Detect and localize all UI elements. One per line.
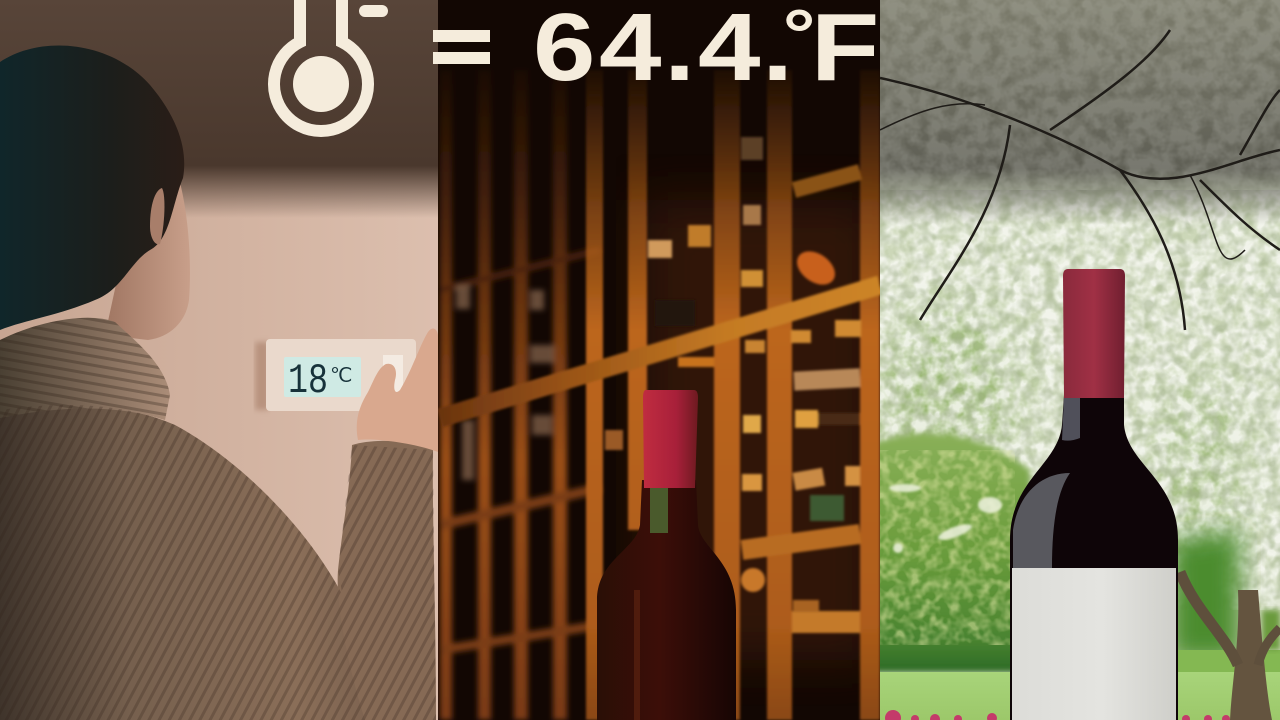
- thermostat reading: 18: [288, 357, 328, 405]
- panel: spring orchard: [870, 0, 1280, 720]
- distant foliage: [870, 434, 1030, 672]
- bottle glass: [1010, 395, 1178, 720]
- panel: person adjusting thermostat: [0, 0, 438, 720]
- sweater collar: [0, 318, 170, 420]
- dark upper band: [880, 0, 1280, 225]
- heading: thermometer equals 64.4°F: [274, 0, 879, 131]
- branches: [880, 30, 1280, 330]
- left shelves: [440, 250, 600, 650]
- warm glow: [640, 200, 880, 660]
- green wash behind blossoms: [880, 310, 1235, 560]
- bottle neck highlight: [650, 488, 668, 533]
- tree trunk: [1230, 590, 1272, 720]
- person ear: [150, 188, 164, 244]
- tree limbs: [1180, 572, 1238, 665]
- panel: wine cellar: [438, 0, 880, 720]
- foreground bottle: [1010, 269, 1178, 720]
- hand: [357, 328, 438, 452]
- collar texture: [0, 318, 170, 420]
- foreground bottle: [597, 390, 736, 720]
- thermostat: [255, 339, 416, 411]
- person face and neck: [105, 175, 190, 340]
- sweater sleeve: [338, 441, 436, 720]
- sweater body: [0, 405, 372, 720]
- green behind tree: [1170, 530, 1240, 660]
- dim stored bottles: [456, 285, 554, 480]
- grass: [880, 672, 1280, 720]
- blossom shadows: [880, 190, 1280, 610]
- rack right, sharper: [440, 70, 880, 720]
- dark upper wall band: [0, 0, 438, 218]
- knit texture: [0, 405, 436, 720]
- thermostat screen: [284, 357, 361, 397]
- bottle capsule: [643, 390, 698, 488]
- white sprays: [889, 484, 1002, 553]
- thermostat button: [383, 355, 403, 395]
- far hedge right: [1178, 650, 1280, 674]
- flowers at ground: [885, 710, 1230, 720]
- bottle shoulder highlight: [1013, 473, 1070, 568]
- foliage speckle: [880, 450, 1015, 645]
- equals sign: [433, 30, 490, 64]
- stored bottles: [605, 137, 861, 612]
- bottle neck highlight: [1062, 398, 1080, 441]
- far right foliage: [1262, 610, 1280, 650]
- bottle capsule: [1063, 269, 1125, 398]
- bottle reflection: [634, 590, 640, 720]
- thermostat reading: ℃: [330, 366, 352, 389]
- rack left, out of focus: [440, 70, 600, 720]
- icon: thermometer: [274, 0, 388, 131]
- bottle glass: [597, 480, 736, 720]
- upper band texture: [880, 0, 1280, 190]
- rack shelves: [440, 285, 880, 418]
- blossoms: [880, 190, 1280, 610]
- person hair: [0, 45, 184, 330]
- bottle label: [1012, 568, 1176, 720]
